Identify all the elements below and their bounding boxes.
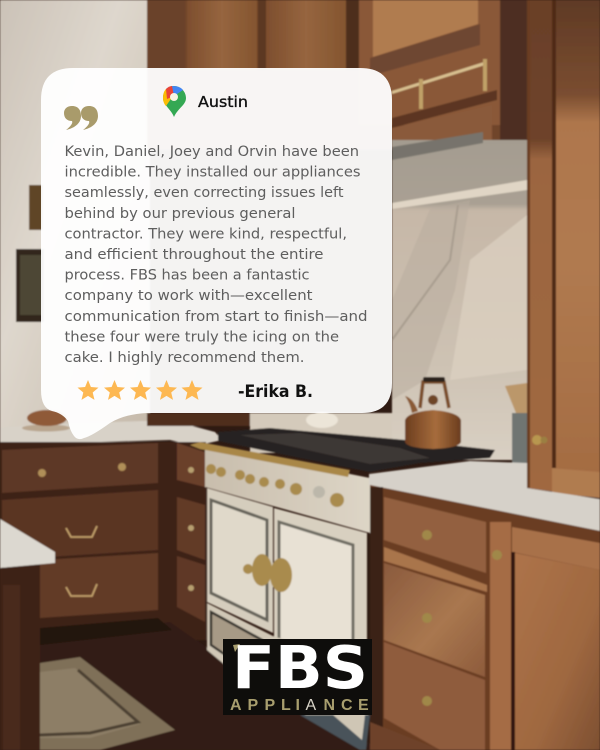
- right countertop: [369, 461, 600, 531]
- upper cabinets: [147, 0, 530, 150]
- island: [0, 519, 55, 750]
- location label: Austin: [198, 93, 248, 111]
- wall art frames: [16, 185, 44, 322]
- star rating: [78, 380, 202, 400]
- logo: FBS Appliance: APPLI A NCE: [230, 697, 369, 714]
- review text: communication from start to finish—and: [64, 309, 368, 325]
- rug: [40, 657, 175, 750]
- review text: seamlessly, even correcting issues left: [64, 185, 344, 201]
- left countertop: [0, 420, 222, 446]
- review text: process. FBS has been a fantastic: [64, 268, 310, 284]
- icon: map pin: [163, 86, 186, 117]
- tall right cabinet: [527, 0, 600, 498]
- brass rail: [392, 62, 485, 94]
- range: cooktop: [218, 428, 495, 472]
- review text: and efficient throughout the entire: [64, 247, 324, 263]
- marble backsplash: [250, 132, 528, 460]
- copper kettle: [405, 377, 461, 449]
- review text: these four were truly the icing on the: [64, 329, 339, 345]
- lower right cabinets: [370, 485, 600, 750]
- wall: [0, 0, 150, 440]
- floor: [38, 622, 380, 750]
- review text: contractor. They were kind, respectful,: [64, 226, 347, 242]
- review text: incredible. They installed our appliances: [64, 165, 360, 181]
- logo: FBS Appliance: FBS: [232, 633, 368, 702]
- range: brass knobs and handles: [206, 464, 344, 592]
- shell decor: [306, 412, 338, 428]
- drawer pulls: [66, 526, 97, 537]
- review text: company to work with—excellent: [64, 288, 313, 304]
- reviewer name: -Erika B.: [238, 382, 313, 401]
- range: body: [190, 442, 370, 750]
- knobs: [422, 530, 432, 540]
- review text: Kevin, Daniel, Joey and Orvin have been: [64, 144, 359, 160]
- utensil jar: [505, 383, 527, 470]
- lower left cabinets: [0, 442, 206, 640]
- review text: [64, 144, 368, 366]
- bread board: [22, 410, 250, 432]
- review text: behind by our previous general: [64, 206, 296, 222]
- panel: review speech bubble: [41, 68, 392, 439]
- icon: quotation mark: [64, 106, 98, 130]
- review text: cake. I highly recommend them.: [64, 350, 304, 366]
